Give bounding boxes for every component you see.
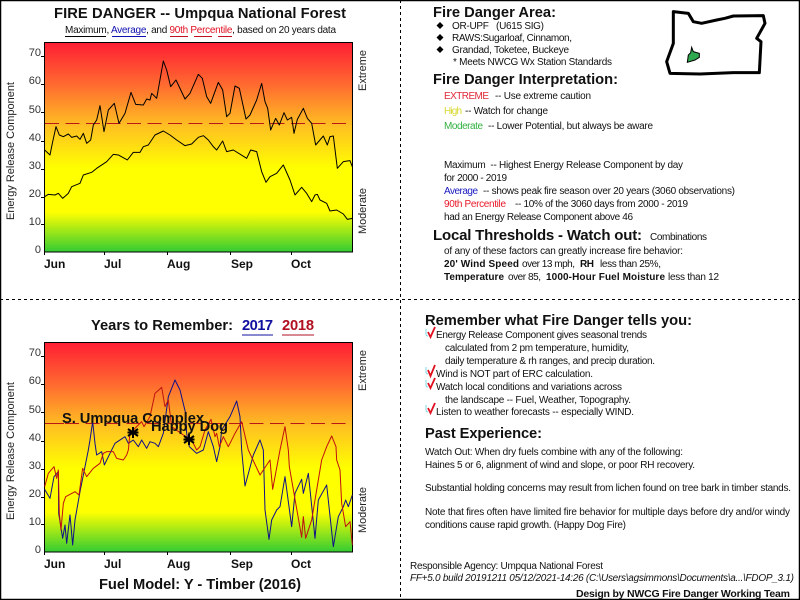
right axis label: extreme: Extreme <box>357 350 369 391</box>
past experience text: Note that fires often have limited fire behavior for multiple days before dry and/or windy <box>425 507 790 518</box>
past experience text: conditions cause rapid growth. (Happy Dog Fire) <box>425 520 626 531</box>
2017 line <box>45 380 352 547</box>
chart title <box>91 318 314 335</box>
y axis tick labels: 10 <box>29 216 41 228</box>
fuel model caption: Fuel Model: Y - Timber (2016) <box>99 577 301 593</box>
thresholds text block: less than 12 <box>668 272 719 283</box>
icon: Oregon map <box>667 12 765 74</box>
y axis tick labels: 50 <box>29 104 41 116</box>
thresholds text block: 1000-Hour Fuel Moisture <box>546 272 665 283</box>
heading: Local Thresholds - Watch out: <box>433 227 642 244</box>
y axis title: Energy Release Component <box>5 82 17 220</box>
month axis: Sep <box>231 257 253 271</box>
chart title: 2018 <box>282 318 314 334</box>
moderate level: Moderate <box>444 121 483 132</box>
checklist text: Wind is NOT part of ERC calculation. <box>436 369 593 380</box>
y axis tick labels: 30 <box>29 160 41 172</box>
panel: local thresholds <box>433 227 719 283</box>
past experience text <box>425 447 791 531</box>
month axis: Oct <box>291 557 311 571</box>
extreme level: -- Use extreme caution <box>495 91 591 102</box>
month axis: Aug <box>167 257 190 271</box>
high level: -- Watch for change <box>465 106 548 117</box>
panel: top chart, maximum and average <box>5 6 369 271</box>
month axis: Aug <box>167 557 190 571</box>
month axis: Jul <box>104 557 121 571</box>
y axis tick labels: 60 <box>29 375 41 387</box>
y axis tick labels: 10 <box>29 516 41 528</box>
y axis tick labels <box>29 47 44 256</box>
past experience text: Substantial holding concerns may result from lichen found on tree bark in timber stands. <box>425 483 791 494</box>
footer credits: Design by NWCG Fire Danger Working Team <box>576 588 790 600</box>
fire marker: Happy Dog <box>184 434 194 445</box>
thresholds text block: less than 25%, <box>600 259 661 270</box>
definitions text block: Maximum -- Highest Energy Release Component by day <box>444 160 683 171</box>
fire label: S. Umpqua Complex: S. Umpqua Complex <box>62 411 205 427</box>
y axis tick labels: 60 <box>29 75 41 87</box>
past experience text: Haines 5 or 6, alignment of wind and slope, or poor RH recovery. <box>425 460 695 471</box>
station list <box>452 21 612 68</box>
y axis tick labels: 0 <box>35 244 41 256</box>
definitions text block: had an Energy Release Component above 46 <box>444 212 633 223</box>
y axis tick labels: 70 <box>29 347 41 359</box>
heading: Fire Danger Interpretation: <box>433 72 618 88</box>
checklist text: Watch local conditions and variations across <box>436 382 622 393</box>
checklist text: daily temperature & rh ranges, and precip duration. <box>445 356 655 367</box>
y axis tick labels: 20 <box>29 188 41 200</box>
y axis tick labels: 30 <box>29 460 41 472</box>
panel: fire danger area <box>433 5 765 74</box>
y axis title: Energy Release Component <box>5 382 17 520</box>
checklist text: Energy Release Component gives seasonal trends <box>436 330 647 341</box>
maximum line <box>45 61 352 168</box>
right axis label: moderate: Moderate <box>357 487 369 533</box>
average line <box>45 131 352 219</box>
chart title: FIRE DANGER -- Umpqua National Forest <box>54 6 346 22</box>
plot area gradient <box>44 42 352 252</box>
y axis tick labels: 70 <box>29 47 41 59</box>
panel: fire danger interpretation <box>433 72 735 223</box>
extreme level: EXTREME <box>444 91 489 102</box>
month axis: Jul <box>104 257 121 271</box>
y axis tick labels <box>29 347 44 556</box>
heading: Past Experience: <box>425 426 542 442</box>
bullet icons <box>436 22 444 53</box>
thresholds text block: of any of these factors can greatly increase fire behavior: <box>444 246 683 257</box>
moderate level: -- Lower Potential, but always be aware <box>488 121 653 132</box>
station list: Grandad, Toketee, Buckeye <box>452 45 569 56</box>
y axis tick labels: 40 <box>29 432 41 444</box>
right axis label: moderate: Moderate <box>357 188 369 234</box>
definitions text block: Average <box>444 186 478 197</box>
chart subtitle legend: Maximum, Average, and 90th Percentile, based on 20 years data <box>65 25 336 36</box>
footer credits: FF+5.0 build 20191211 05/12/2021-14:26 (C:\Users\agsimmons\Documents\a...\FDOP_3.1) <box>410 573 794 584</box>
fire marker: S. Umpqua Complex <box>128 427 138 438</box>
right axis label: extreme: Extreme <box>357 50 369 91</box>
y axis tick labels: 40 <box>29 132 41 144</box>
checklist text: the landscape -- Fuel, Weather, Topography. <box>445 395 631 406</box>
y axis tick labels: 50 <box>29 404 41 416</box>
icon: check marks <box>426 327 435 413</box>
chart title: Years to Remember: <box>91 318 233 334</box>
station list: OR-UPF (U615 SIG) <box>452 21 544 32</box>
extreme level <box>444 91 591 102</box>
checklist text <box>436 330 655 418</box>
heading: Remember what Fire Danger tells you: <box>425 313 692 329</box>
90th percentile threshold line <box>45 122 351 124</box>
definitions text block: for 2000 - 2019 <box>444 173 507 184</box>
month axis: Oct <box>291 257 311 271</box>
footer credits <box>410 561 794 600</box>
station list: RAWS:Sugarloaf, Cinnamon, <box>452 33 572 44</box>
fire label: Happy Dog: Happy Dog <box>151 419 228 435</box>
station list: * Meets NWCG Wx Station Standards <box>453 57 612 68</box>
thresholds text block: Temperature <box>444 272 504 283</box>
month axis: Jun <box>44 557 65 571</box>
definitions text block: 90th Percentile <box>444 199 506 210</box>
heading: Fire Danger Area: <box>433 5 556 21</box>
y axis tick labels: 20 <box>29 488 41 500</box>
thresholds text block: over 85, <box>508 272 541 283</box>
thresholds text block: RH <box>580 259 594 270</box>
month axis: Jun <box>44 257 65 271</box>
90th percentile threshold line <box>45 422 351 424</box>
month axis <box>44 552 311 571</box>
chart title: 2017 <box>242 318 273 334</box>
month axis: Sep <box>231 557 253 571</box>
thresholds text block: over 13 mph, <box>522 259 575 270</box>
2018 line <box>45 387 352 545</box>
high level: High <box>444 106 462 117</box>
panel: bottom chart, years to remember <box>5 318 369 593</box>
plot area gradient <box>44 342 352 552</box>
y axis tick labels: 0 <box>35 544 41 556</box>
thresholds text block: 20' Wind Speed <box>444 259 519 270</box>
definitions text block: -- shows peak fire season over 20 years (3060 observations) <box>483 186 735 197</box>
footer credits: Responsible Agency: Umpqua National Forest <box>410 561 603 572</box>
past experience text: Watch Out: When dry fuels combine with any of the following: <box>425 447 683 458</box>
month axis <box>44 252 311 271</box>
panel: past experience <box>425 426 791 531</box>
panel: remember what fire danger tells you <box>425 313 692 418</box>
thresholds text block <box>444 232 719 283</box>
definitions text block <box>444 160 735 223</box>
thresholds text block: Combinations <box>650 232 707 243</box>
checklist text: Listen to weather forecasts -- especially WIND. <box>436 407 634 418</box>
checklist text: calculated from 2 pm temperature, humidity, <box>445 343 629 354</box>
definitions text block: -- 10% of the 3060 days from 2000 - 2019 <box>515 199 688 210</box>
